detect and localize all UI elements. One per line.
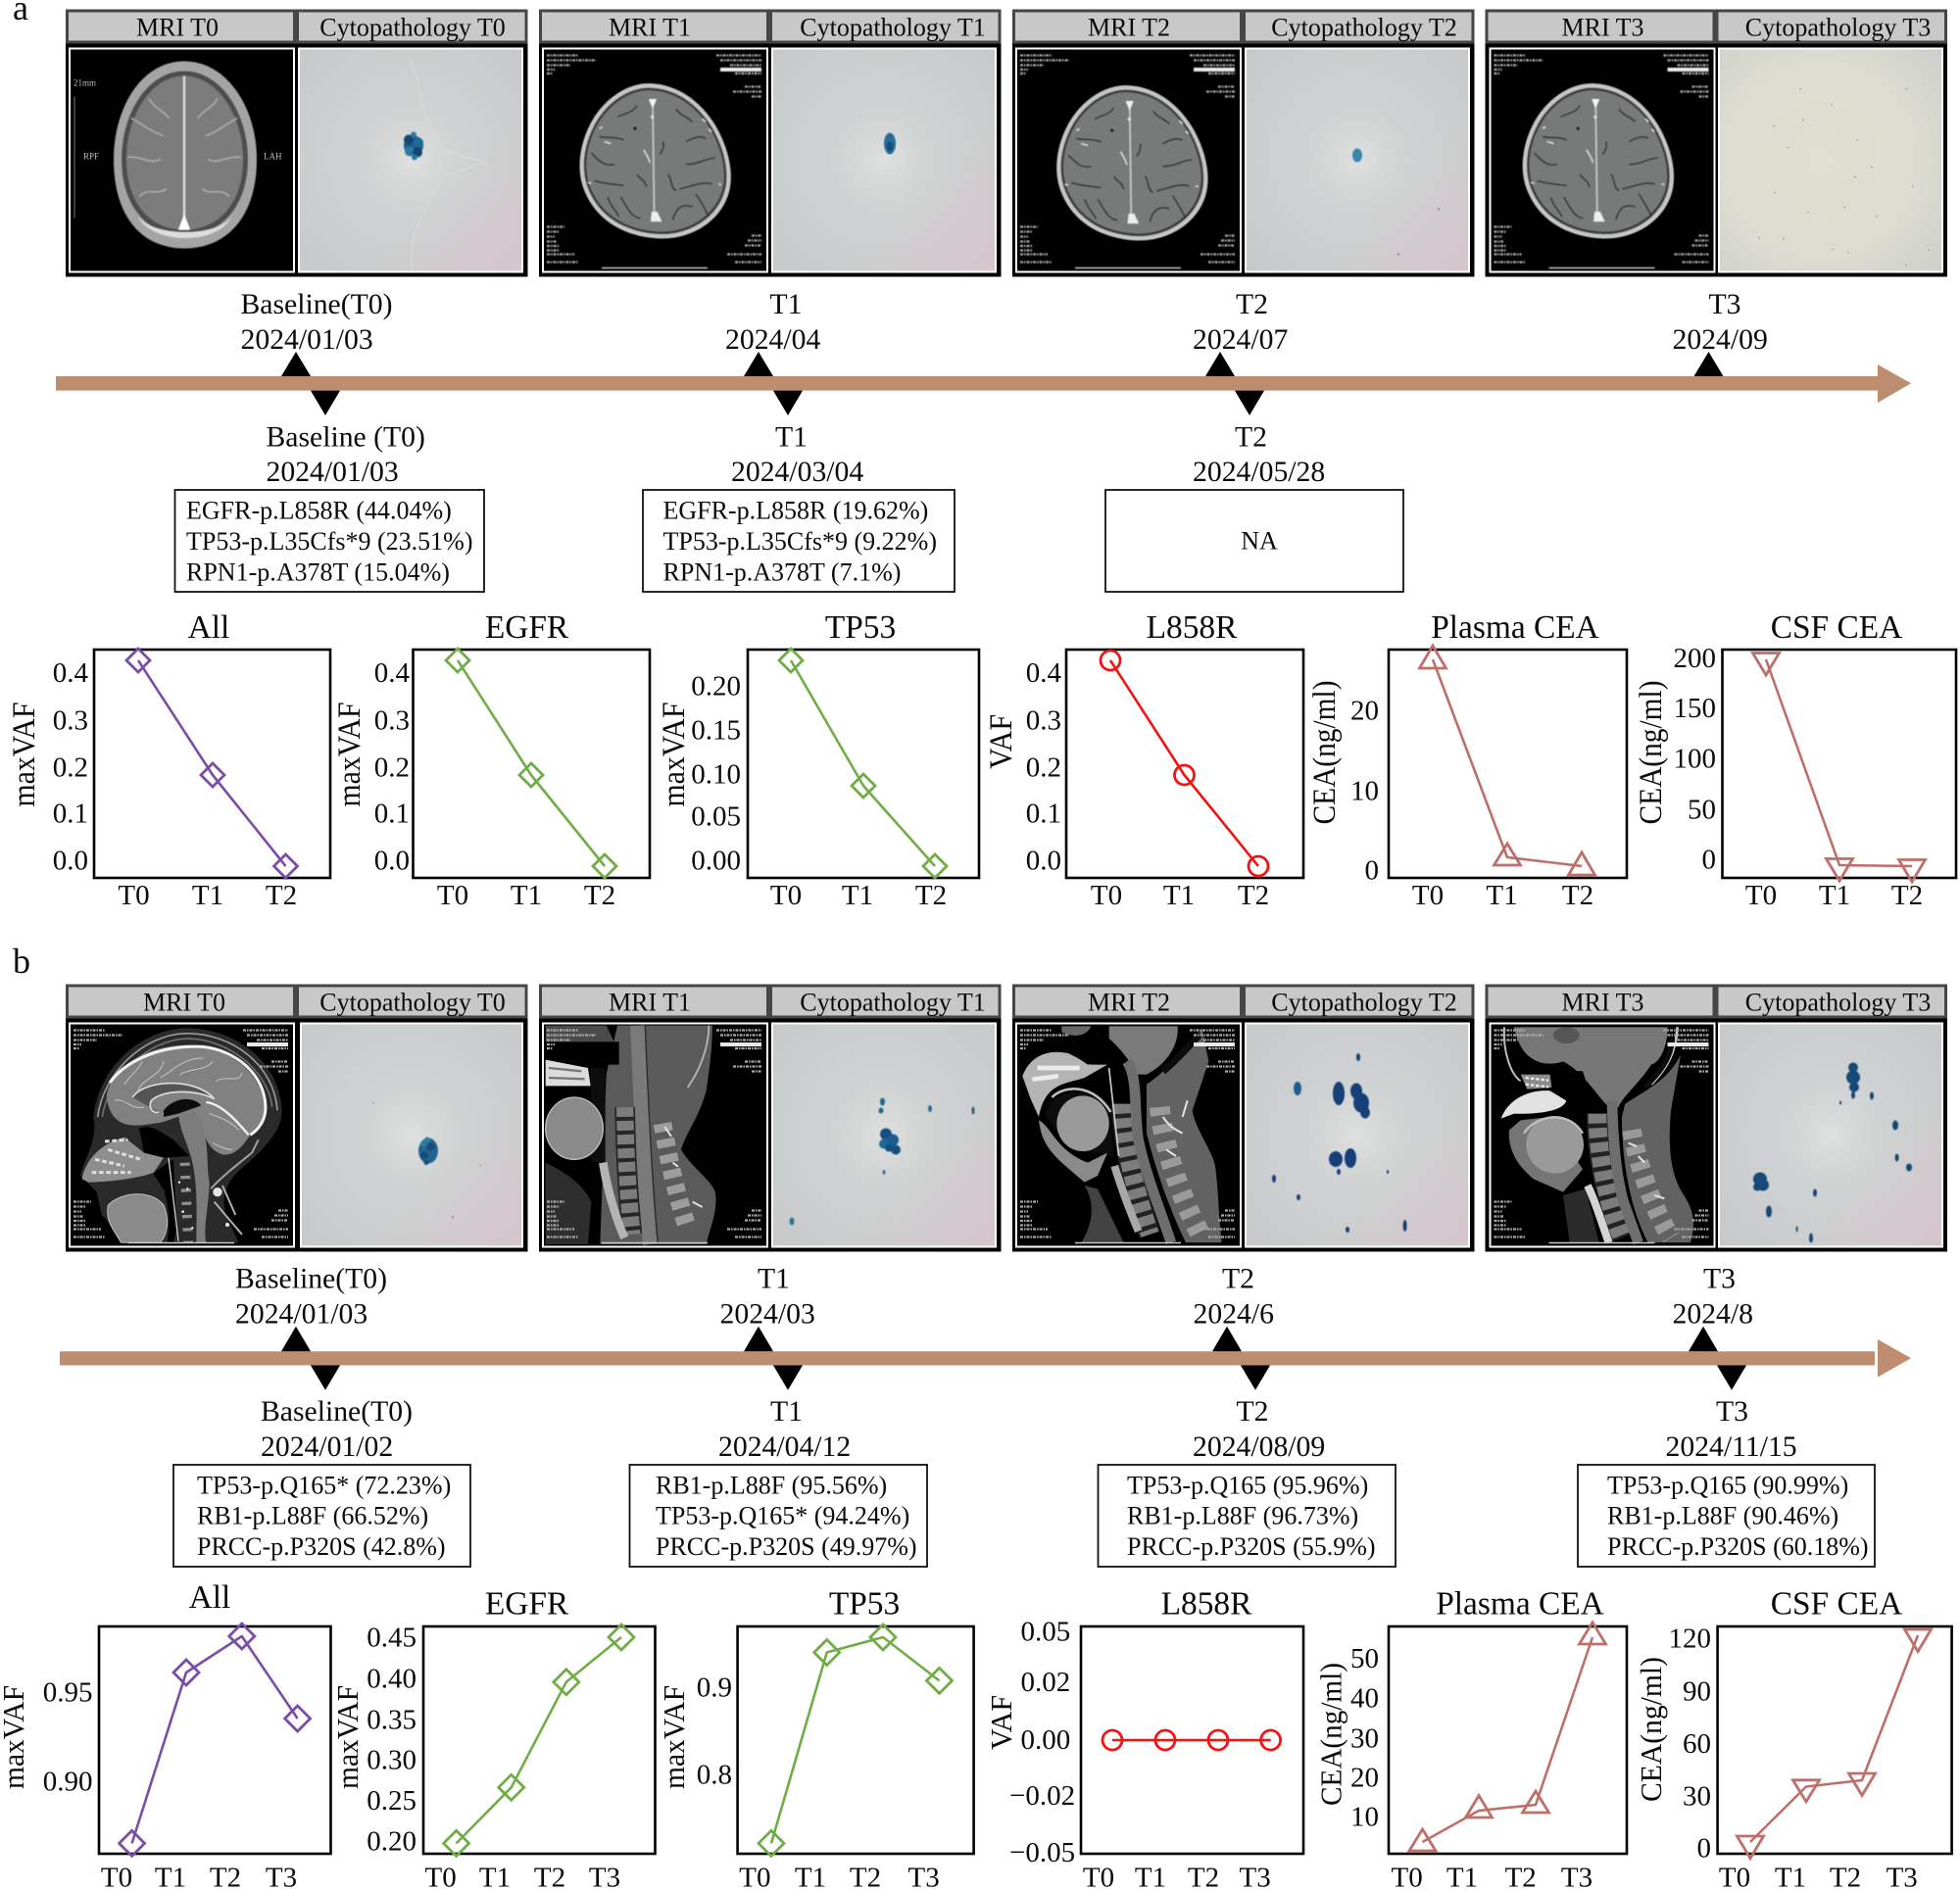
- panel b: imaging milestones above the timeline: 2024/6: [1194, 1299, 1274, 1331]
- imaging pair: T1: MRI T1: [609, 14, 691, 41]
- MRI T1 sagittal image: [543, 1023, 767, 1246]
- panel a: sequencing milestones below the timeline: 2024/05/28: [1193, 457, 1325, 488]
- chart b: L858R: L858R: [1161, 1585, 1252, 1623]
- panel a: mutation box T0: RPN1-p.A378T (15.04%): [186, 558, 450, 586]
- chart a: L858R: T0: [1091, 880, 1122, 911]
- panel a: sequencing milestones below the timeline: 2024/03/04: [731, 457, 863, 488]
- imaging pair: T1: [539, 10, 1002, 276]
- chart b: L858R: 0.02: [1021, 1667, 1070, 1698]
- panel b: sequencing milestones below the timeline: Baseline(T0): [261, 1396, 413, 1428]
- chart a: L858R: 0.0: [1026, 845, 1061, 876]
- chart a: Plasma CEA: 20: [1350, 696, 1379, 727]
- chart a: L858R: T2: [1238, 880, 1269, 911]
- panel a: mutation box T1: [643, 490, 955, 592]
- panel b: mutation box T1: TP53-p.Q165* (94.24%): [656, 1501, 909, 1530]
- chart b: L858R: −0.02: [1009, 1780, 1075, 1812]
- panel b: mutation box T3: [1578, 1465, 1875, 1567]
- imaging pair: T3: MRI T3: [1561, 988, 1644, 1017]
- imaging pair: T0: Cytopathology T0: [319, 988, 506, 1017]
- chart b: EGFR: 0.30: [367, 1744, 416, 1775]
- imaging pair: T3: [1486, 10, 1947, 276]
- chart b: Plasma CEA: 10: [1350, 1801, 1379, 1832]
- panel b: mutation box T1: PRCC-p.P320S (49.97%): [656, 1532, 917, 1561]
- chart a: TP53: [657, 609, 979, 911]
- chart b: TP53: [657, 1585, 974, 1890]
- chart b: CSF CEA: 120: [1668, 1623, 1711, 1654]
- chart a: Plasma CEA: T2: [1562, 880, 1593, 911]
- chart b: Plasma CEA: Plasma CEA: [1436, 1585, 1604, 1623]
- chart b: CSF CEA: 60: [1683, 1728, 1711, 1760]
- chart b: CSF CEA: 30: [1683, 1781, 1711, 1813]
- chart a: EGFR: T2: [584, 880, 615, 911]
- panel a: mutation box T2: [1105, 490, 1403, 592]
- panel b: sequencing milestones below the timeline: T2: [1237, 1396, 1268, 1428]
- MRI T0 image: [70, 49, 294, 272]
- imaging pair: T3: [1486, 984, 1947, 1252]
- chart a: EGFR: 0.0: [374, 845, 410, 876]
- chart a: EGFR: 0.1: [374, 798, 410, 829]
- panel a: imaging milestones above the timeline: [241, 289, 1768, 376]
- panel b: mutation box T1: RB1-p.L88F (95.56%): [656, 1472, 887, 1499]
- chart a: TP53: T1: [842, 880, 873, 911]
- panel a: imaging milestones above the timeline: T2: [1236, 289, 1268, 320]
- MRI T0 image: RPF: [83, 151, 99, 161]
- chart b: All: 0.90: [43, 1766, 92, 1797]
- chart b: CSF CEA: CEA(ng/ml): [1634, 1657, 1668, 1802]
- panel b: imaging milestones above the timeline: 2024/01/03: [235, 1299, 368, 1331]
- panel b: mutation box T3: TP53-p.Q165 (90.99%): [1607, 1472, 1848, 1499]
- panel b: mutation box T3: RB1-p.L88F (90.46%): [1607, 1501, 1838, 1530]
- chart b: Plasma CEA: 50: [1350, 1643, 1379, 1674]
- imaging pair: T3: Cytopathology T3: [1745, 988, 1931, 1017]
- imaging pair: T1: Cytopathology T1: [800, 988, 986, 1017]
- chart b: CSF CEA: [1634, 1585, 1952, 1890]
- chart a: All: All: [188, 609, 229, 646]
- panel b: imaging milestones above the timeline: 2024/03: [719, 1299, 815, 1331]
- chart a: All: 0.4: [53, 657, 88, 689]
- chart a: CSF CEA: T1: [1819, 880, 1850, 911]
- Cytopathology T3 image: [1719, 1023, 1942, 1246]
- chart a: CSF CEA: 0: [1701, 845, 1716, 876]
- chart b: EGFR: [330, 1585, 655, 1890]
- chart a: TP53: TP53: [825, 609, 896, 646]
- chart b: TP53: 0.9: [697, 1672, 732, 1703]
- chart a: TP53: maxVAF: [657, 702, 692, 807]
- chart b: EGFR: 0.40: [367, 1664, 416, 1695]
- chart b: EGFR: maxVAF: [330, 1685, 365, 1789]
- panel b: mutation box T2: TP53-p.Q165 (95.96%): [1127, 1472, 1368, 1499]
- Cytopathology T2 image: [1246, 49, 1469, 272]
- chart b: CSF CEA: CSF CEA: [1771, 1585, 1902, 1623]
- chart b: CSF CEA: 90: [1683, 1675, 1711, 1707]
- chart b: TP53: maxVAF: [657, 1685, 691, 1789]
- chart a: Plasma CEA: T1: [1486, 880, 1518, 911]
- chart a: L858R: 0.4: [1026, 657, 1062, 689]
- chart b: TP53: TP53: [829, 1585, 900, 1623]
- panel label b: b: [13, 942, 30, 981]
- chart a: CSF CEA: CSF CEA: [1771, 609, 1902, 646]
- chart a: L858R: T1: [1163, 880, 1195, 911]
- chart a: All: 0.0: [53, 845, 88, 876]
- chart b: EGFR: 0.45: [367, 1623, 416, 1654]
- chart a: Plasma CEA: 0: [1364, 854, 1379, 886]
- panel a: imaging milestones above the timeline: 2024/01/03: [241, 324, 373, 356]
- panel b: mutation box T2: RB1-p.L88F (96.73%): [1127, 1501, 1358, 1530]
- chart a: All: T0: [118, 880, 150, 911]
- imaging pair: T2: [1012, 984, 1474, 1252]
- chart a: CSF CEA: 150: [1674, 693, 1716, 724]
- chart a: CSF CEA: 50: [1688, 794, 1716, 825]
- chart b: EGFR: EGFR: [485, 1585, 569, 1623]
- panel b: mutation box T0: TP53-p.Q165* (72.23%): [197, 1472, 451, 1499]
- imaging pair: T1: MRI T1: [609, 988, 691, 1017]
- panel b: timeline arrow: [60, 1339, 1911, 1378]
- panel a: sequencing milestones below the timeline: Baseline (T0): [267, 421, 425, 453]
- panel b: sequencing milestones below the timeline: 2024/08/09: [1193, 1431, 1325, 1463]
- panel a: sequencing milestones below the timeline: T2: [1235, 421, 1267, 453]
- chart a: All: 0.2: [53, 752, 88, 784]
- MRI T0 image: 21mm: [74, 78, 96, 88]
- chart b: EGFR: 0.35: [367, 1704, 416, 1735]
- panel b: sequencing milestones below the timeline: 2024/11/15: [1666, 1431, 1797, 1463]
- panel a: imaging milestones above the timeline: T3: [1709, 289, 1740, 320]
- panel b: sequencing milestones below the timeline: 2024/01/02: [261, 1431, 393, 1463]
- chart a: EGFR: 0.4: [374, 657, 410, 689]
- panel b: imaging milestones above the timeline: [235, 1264, 1753, 1351]
- panel a: mutation box T0: TP53-p.L35Cfs*9 (23.51%): [186, 527, 472, 556]
- chart a: TP53: 0.10: [691, 758, 741, 790]
- chart a: Plasma CEA: CEA(ng/ml): [1307, 680, 1343, 825]
- panel b: mutation box T1: [629, 1465, 927, 1567]
- chart a: L858R: VAF: [984, 714, 1019, 769]
- chart a: CSF CEA: CEA(ng/ml): [1634, 680, 1669, 825]
- chart b: EGFR: 0.20: [367, 1826, 416, 1858]
- panel a: imaging milestones above the timeline: Baseline(T0): [241, 289, 392, 320]
- panel a: imaging milestones above the timeline: 2024/04: [725, 324, 820, 356]
- chart a: Plasma CEA: T0: [1412, 880, 1444, 911]
- panel a: imaging milestones above the timeline: T1: [770, 289, 802, 320]
- imaging pair: T0: MRI T0: [143, 988, 225, 1017]
- chart a: EGFR: 0.3: [374, 705, 410, 737]
- chart b: L858R: 0.00: [1021, 1724, 1070, 1756]
- MRI T2 sagittal image: [1016, 1023, 1241, 1246]
- chart a: All: 0.1: [53, 798, 88, 829]
- panel b: mutation box T3: PRCC-p.P320S (60.18%): [1607, 1532, 1869, 1561]
- panel b: imaging milestones above the timeline: T3: [1703, 1264, 1736, 1295]
- chart b: All: [0, 1579, 331, 1890]
- MRI T0 sagittal image: [70, 1023, 294, 1246]
- panel b: mutation box T0: PRCC-p.P320S (42.8%): [197, 1532, 446, 1561]
- chart a: Plasma CEA: 10: [1350, 776, 1379, 807]
- panel b: imaging milestones above the timeline: T1: [758, 1264, 790, 1295]
- panel a: imaging milestones above the timeline: 2024/09: [1672, 324, 1768, 356]
- panel a: mutation box T2: NA: [1241, 527, 1278, 555]
- imaging pair: T0: [66, 10, 527, 276]
- chart a: All: 0.3: [53, 705, 88, 737]
- Cytopathology T0 image: [301, 1023, 522, 1246]
- chart b: All: All: [189, 1579, 230, 1616]
- panel b: mutation box T2: PRCC-p.P320S (55.9%): [1127, 1532, 1376, 1561]
- MRI T1 image: [543, 49, 767, 272]
- chart a: TP53: 0.00: [691, 845, 741, 876]
- chart a: Plasma CEA: [1307, 609, 1627, 911]
- chart a: CSF CEA: T2: [1891, 880, 1923, 911]
- chart a: TP53: 0.15: [691, 715, 741, 747]
- Cytopathology T2 image: [1246, 1023, 1469, 1246]
- chart a: All: T1: [192, 880, 223, 911]
- Cytopathology T1 image: [772, 49, 996, 272]
- chart b: Plasma CEA: 40: [1350, 1683, 1379, 1715]
- chart a: EGFR: maxVAF: [332, 702, 368, 807]
- panel b: mutation box T0: RB1-p.L88F (66.52%): [197, 1501, 428, 1530]
- MRI T3 sagittal image: [1490, 1023, 1715, 1246]
- imaging pair: T0: [66, 984, 527, 1252]
- imaging pair: T2: Cytopathology T2: [1271, 988, 1457, 1017]
- panel b: imaging strip: [66, 984, 1947, 1252]
- chart a: EGFR: T1: [511, 880, 542, 911]
- chart b: TP53: 0.8: [697, 1760, 732, 1791]
- MRI T2 image: [1016, 49, 1241, 272]
- panel a: sequencing milestones below the timeline: [267, 391, 1325, 488]
- panel b: mutation box T0: [173, 1465, 470, 1567]
- Cytopathology T0 image: [299, 49, 522, 272]
- panel a: mutation box T0: EGFR-p.L858R (44.04%): [186, 496, 452, 525]
- imaging pair: T1: Cytopathology T1: [800, 14, 986, 41]
- panel b: mutation box T2: [1098, 1465, 1396, 1567]
- chart b: Plasma CEA: [1314, 1585, 1627, 1890]
- chart a: All: T2: [266, 880, 297, 911]
- chart a: CSF CEA: 200: [1674, 643, 1716, 674]
- panel a: sequencing milestones below the timeline: 2024/01/03: [267, 457, 399, 488]
- chart a: CSF CEA: 100: [1674, 743, 1716, 774]
- MRI T0 image: LAH: [264, 151, 282, 161]
- chart a: All: maxVAF: [7, 702, 42, 807]
- chart b: L858R: −0.05: [1009, 1837, 1075, 1868]
- chart a: EGFR: 0.2: [374, 752, 410, 784]
- chart a: L858R: [984, 609, 1303, 911]
- panel a: mutation box T1: RPN1-p.A378T (7.1%): [662, 558, 901, 586]
- panel a: mutation box T0: [174, 490, 484, 592]
- imaging pair: T3: Cytopathology T3: [1745, 14, 1931, 41]
- chart b: EGFR: 0.25: [367, 1785, 416, 1817]
- panel b: sequencing milestones below the timeline: T3: [1716, 1396, 1748, 1428]
- chart b: L858R: 0.05: [1021, 1617, 1070, 1648]
- imaging pair: T0: Cytopathology T0: [319, 14, 506, 41]
- chart a: L858R: 0.1: [1026, 798, 1061, 829]
- chart b: Plasma CEA: 20: [1350, 1762, 1379, 1793]
- panel b: imaging milestones above the timeline: Baseline(T0): [235, 1264, 387, 1295]
- chart a: EGFR: EGFR: [485, 609, 569, 646]
- panel b: sequencing milestones below the timeline: T1: [770, 1396, 803, 1428]
- chart a: TP53: 0.05: [691, 801, 741, 833]
- panel a: sequencing milestones below the timeline: T1: [775, 421, 808, 453]
- chart a: All: [7, 609, 330, 911]
- imaging pair: T2: MRI T2: [1088, 14, 1170, 41]
- panel a: imaging strip: [66, 10, 1947, 276]
- chart a: TP53: T0: [770, 880, 802, 911]
- Cytopathology T3 image: [1719, 49, 1942, 272]
- chart a: TP53: 0.20: [691, 670, 741, 702]
- panel b: sequencing milestones below the timeline: [261, 1366, 1797, 1463]
- imaging pair: T2: MRI T2: [1088, 988, 1170, 1017]
- panel a: mutation box T1: EGFR-p.L858R (19.62%): [662, 496, 928, 525]
- chart a: Plasma CEA: Plasma CEA: [1431, 609, 1599, 646]
- chart a: L858R: L858R: [1147, 609, 1238, 646]
- imaging pair: T1: [539, 984, 1002, 1252]
- panel b: imaging milestones above the timeline: T2: [1222, 1264, 1254, 1295]
- chart a: CSF CEA: [1634, 609, 1956, 911]
- imaging pair: T2: Cytopathology T2: [1271, 14, 1457, 41]
- imaging pair: T2: [1012, 10, 1474, 276]
- imaging pair: T0: MRI T0: [136, 14, 219, 41]
- Cytopathology T1 image: [772, 1023, 996, 1246]
- panel a: timeline arrow: [56, 364, 1911, 403]
- imaging pair: T3: MRI T3: [1561, 14, 1644, 41]
- panel b: imaging milestones above the timeline: 2024/8: [1672, 1299, 1753, 1331]
- panel a: mutation box T1: TP53-p.L35Cfs*9 (9.22%): [662, 527, 937, 556]
- chart b: CSF CEA: 0: [1697, 1832, 1711, 1864]
- chart b: All: 0.95: [43, 1677, 92, 1709]
- chart a: TP53: T2: [915, 880, 947, 911]
- chart b: Plasma CEA: CEA(ng/ml): [1314, 1663, 1348, 1806]
- chart b: Plasma CEA: 30: [1350, 1722, 1379, 1754]
- chart a: CSF CEA: T0: [1745, 880, 1777, 911]
- panel b: sequencing milestones below the timeline: 2024/04/12: [718, 1431, 851, 1463]
- chart a: EGFR: T0: [437, 880, 468, 911]
- MRI T3 image: [1490, 49, 1715, 272]
- chart b: L858R: VAF: [984, 1695, 1018, 1750]
- chart a: EGFR: [332, 609, 650, 911]
- chart a: L858R: 0.2: [1026, 752, 1061, 784]
- chart b: L858R: [984, 1585, 1303, 1890]
- chart a: L858R: 0.3: [1026, 705, 1061, 737]
- panel a: imaging milestones above the timeline: 2024/07: [1193, 324, 1288, 356]
